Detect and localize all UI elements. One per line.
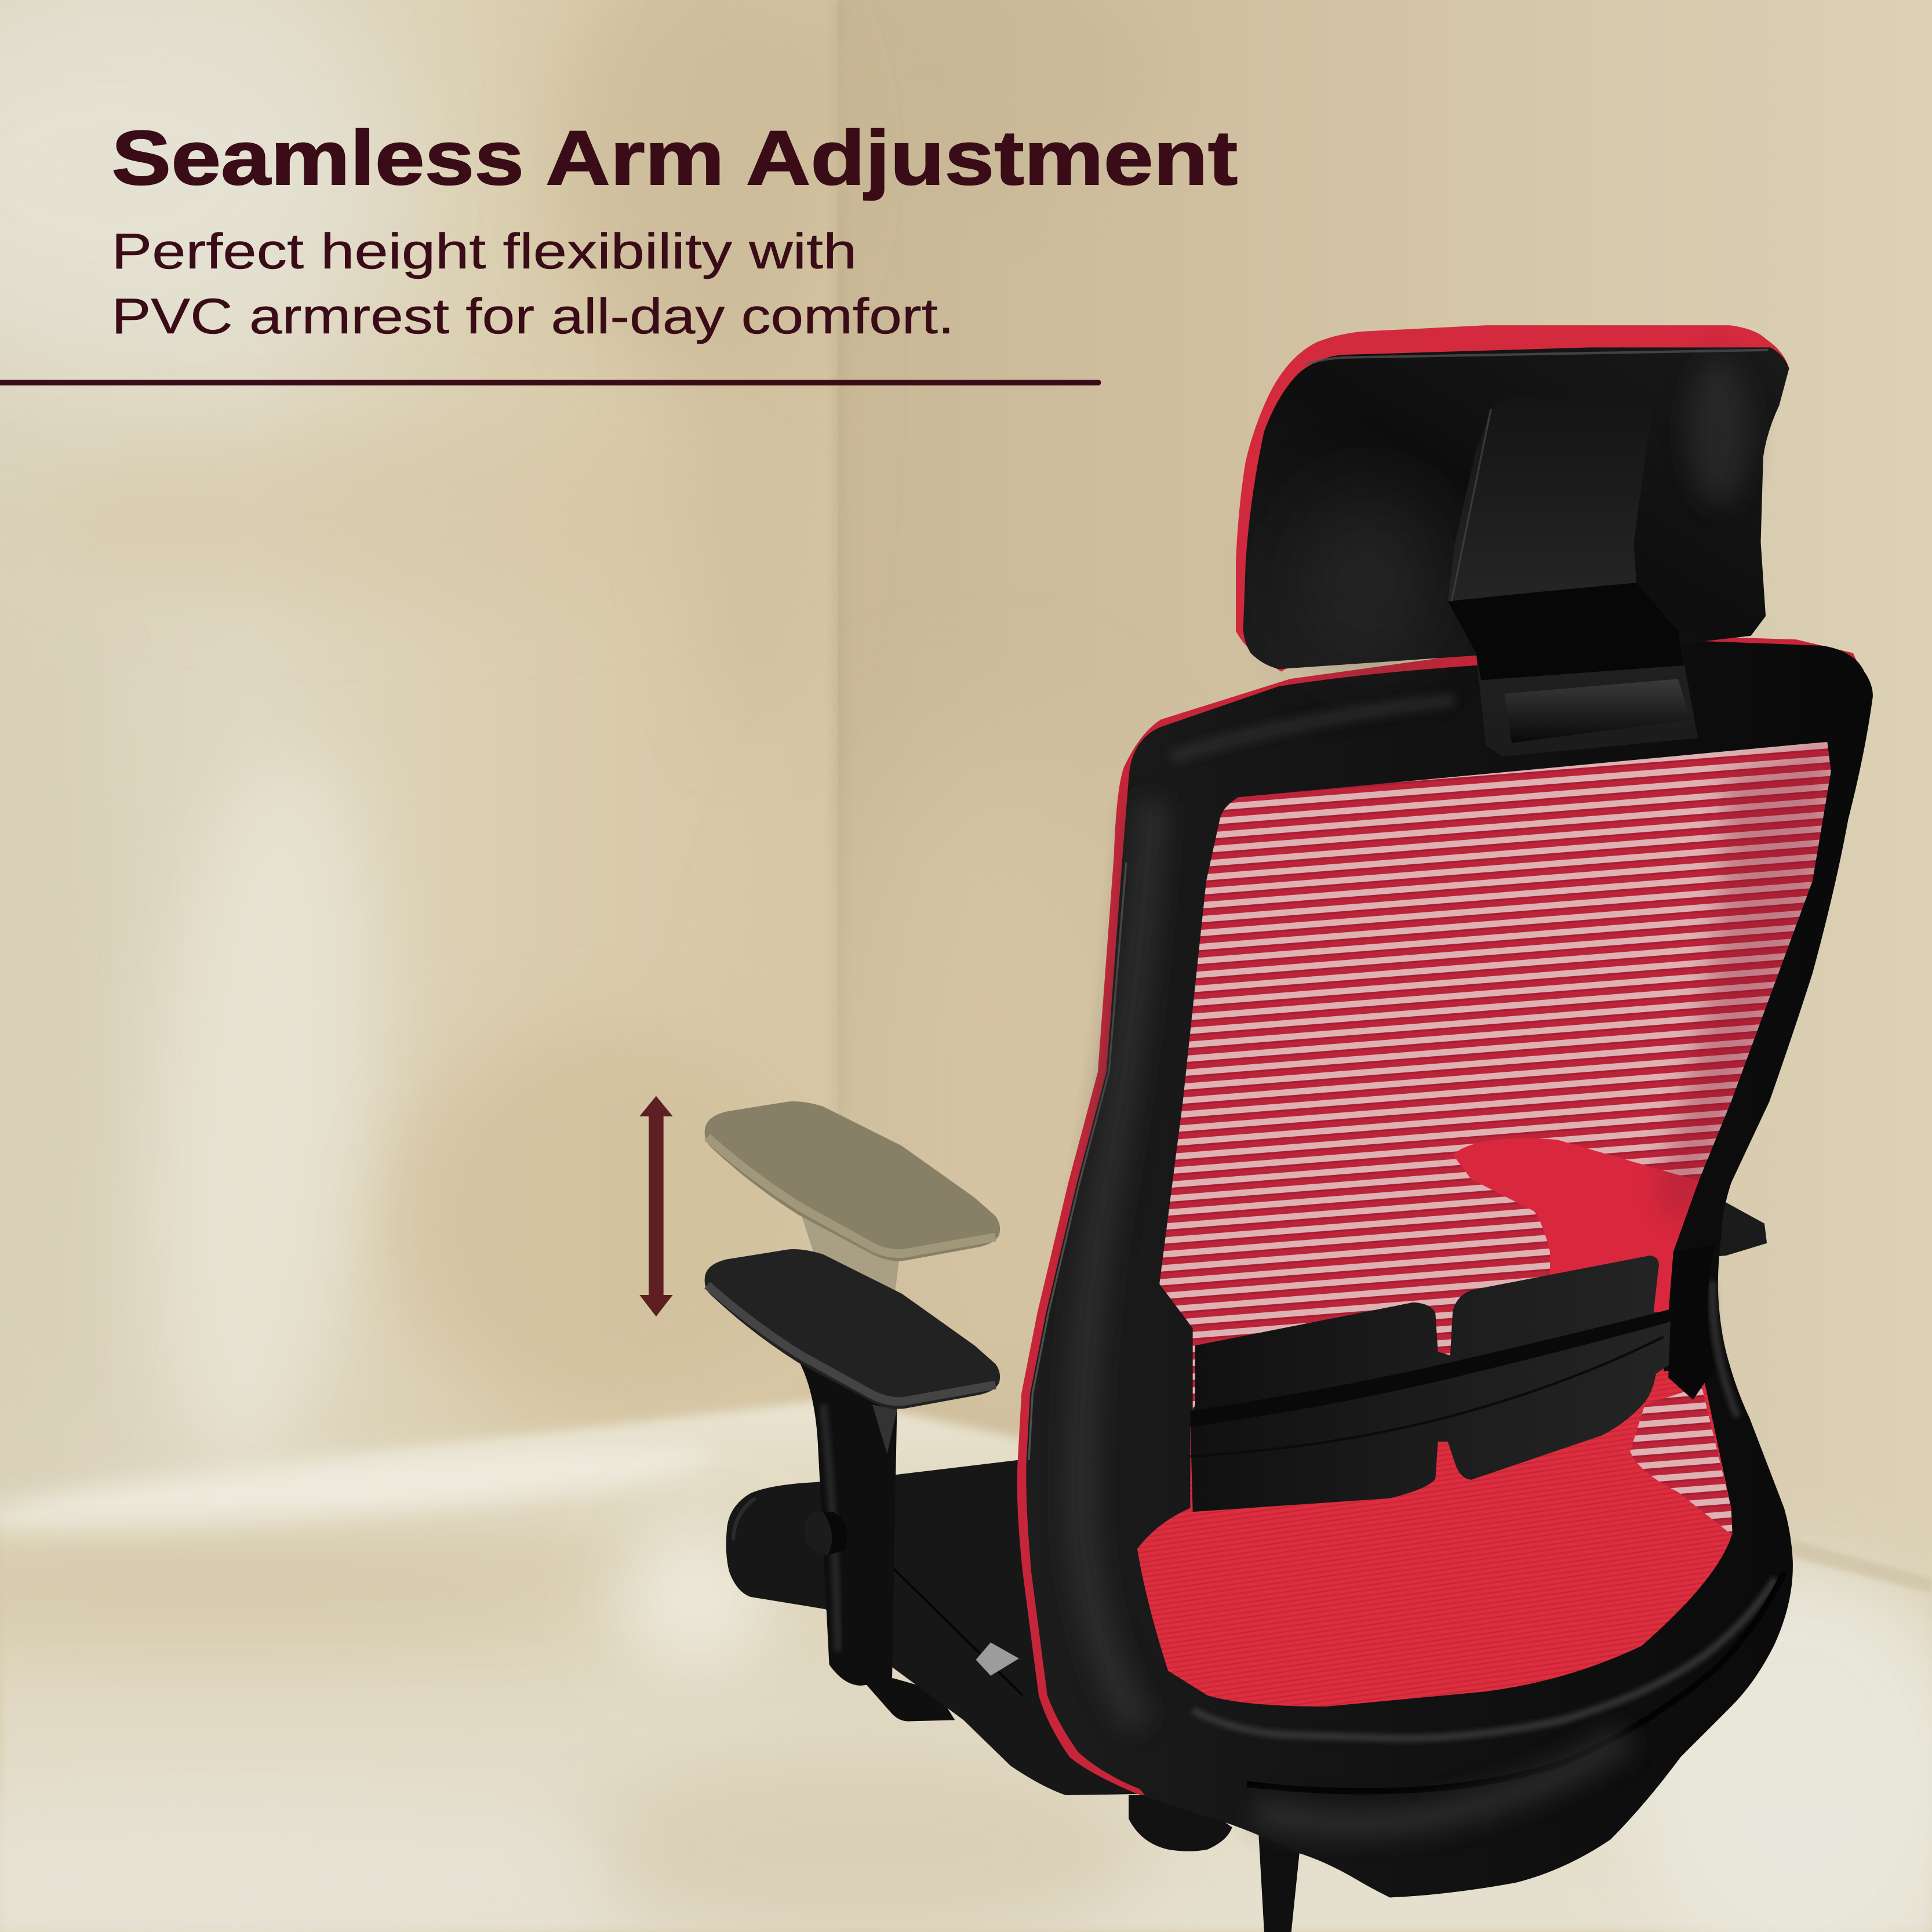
armrest pad: lowered position — [705, 1249, 1000, 1409]
heading rule — [0, 380, 1101, 385]
subtitle text block: Perfect height flexibility with — [111, 224, 857, 279]
chair base: gas lift and caster — [1129, 1793, 1300, 1932]
chair — [705, 325, 1873, 1932]
subtitle text block — [111, 224, 954, 344]
frame highlights — [1029, 700, 1784, 1824]
armrest loop bracket — [865, 1678, 955, 1722]
seat label tag — [976, 1642, 1019, 1676]
title: Seamless Arm Adjustment — [111, 115, 1238, 201]
upper mesh panel — [1159, 742, 1831, 1411]
seat cushion — [726, 1460, 1140, 1795]
ghost armrest: raised position — [705, 1101, 1000, 1296]
lumbar support — [1190, 1245, 1715, 1512]
back right armrest — [1713, 1203, 1767, 1257]
armrest post and knob — [798, 1360, 897, 1686]
red piping: backrest edge — [1017, 636, 1864, 1811]
headrest bracket — [1448, 392, 1698, 756]
arrow: height adjustment — [639, 1096, 673, 1316]
backrest frame and shell — [1026, 641, 1873, 1897]
subtitle text block: PVC armrest for all-day comfort. — [111, 289, 954, 344]
headrest — [1236, 325, 1789, 756]
lower mesh seat panel — [1137, 1367, 1733, 1707]
